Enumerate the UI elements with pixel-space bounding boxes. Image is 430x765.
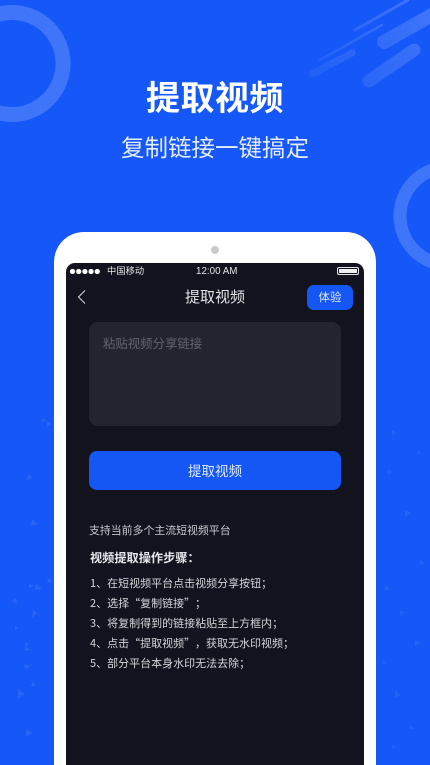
step 3: 3、将复制得到的链接粘贴至上方框内； — [90, 615, 283, 631]
button: extract video — [89, 451, 341, 490]
screen heading: 提取视频 — [185, 286, 245, 307]
button: extract video: 提取视频 — [188, 460, 242, 480]
icon: phone camera dot — [211, 246, 219, 254]
icon: back chevron — [78, 290, 86, 304]
title: 提取视频 — [146, 71, 284, 120]
button: trial: 体验 — [318, 289, 342, 305]
status bar time: 12:00 AM — [196, 266, 237, 277]
step 4: 4、点击 “提取视频” ，获取无水印视频； — [90, 635, 294, 651]
step 2: 2、选择 “复制链接” ； — [90, 595, 206, 611]
step list — [90, 575, 294, 671]
steps heading: 视频提取操作步骤： — [90, 548, 200, 566]
subtitle: 复制链接一键搞定 — [121, 129, 309, 163]
step 1: 1、在短视频平台点击视频分享按钮； — [90, 575, 272, 591]
button: trial — [307, 285, 353, 310]
supported platforms note: 支持当前多个主流短视频平台 — [89, 522, 231, 538]
panel: app screen — [66, 263, 364, 765]
step 5: 5、部分平台本身水印无法去除； — [90, 655, 250, 671]
input box: paste link — [89, 322, 341, 426]
icon: battery — [337, 267, 359, 275]
input placeholder: 粘贴视频分享链接 — [103, 334, 202, 352]
carrier label: 中国移动 — [107, 263, 144, 277]
icon: signal dots — [70, 269, 101, 274]
phone mockup — [54, 232, 376, 765]
